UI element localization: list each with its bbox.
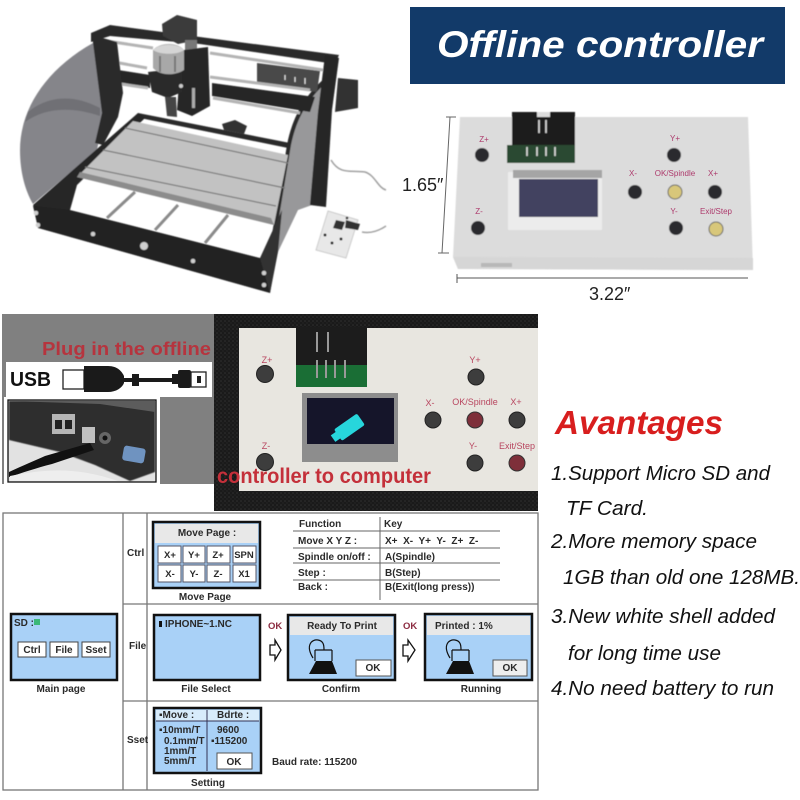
screen: main page: Main page [37,684,86,695]
advantages list: 1GB than old one 128MB. [563,567,800,589]
width dimension: 3.22″ [589,284,631,304]
controller product photo with dimensions [402,112,753,304]
USB strip: USB [10,369,51,391]
title banner [410,7,785,84]
function key table: Step : [298,568,326,579]
screen: setting: 0.1mm/T [164,736,205,747]
button labels: X+ [510,397,522,407]
Z stepper motor [162,15,197,44]
width dimension [457,274,748,304]
screen: main page: Sset [85,645,107,656]
button labels: OK/Spindle [452,397,498,407]
screen: confirm [288,615,395,695]
buttons [471,148,722,235]
function key table: Key [384,519,403,530]
function key table: A(Spindle) [385,552,435,563]
screen: setting: ▪115200 [211,736,248,747]
gantry left upright [92,35,123,145]
panel: controller connected photo [214,314,538,511]
table carriage back bar [138,113,290,148]
left acrylic shield [20,43,103,204]
screen: running: Printed : 1% [435,621,493,632]
connector [296,327,367,387]
function key table: Back : [298,582,328,593]
screen: confirm: Confirm [322,684,360,695]
advantages list: 1.Support Micro SD and [551,463,771,485]
OK arrow 2 [403,621,417,661]
advantages list: TF Card. [566,498,648,520]
controller body [453,112,753,270]
cable [331,160,386,233]
button labels: Z+ [479,135,489,144]
heading: plug in: Plug in the offline [42,339,211,359]
function key table: B(Step) [385,568,421,579]
small controller [316,211,358,258]
button labels: Y- [469,441,477,451]
screen: file select: File Select [181,684,231,695]
button labels [262,355,535,451]
height dimension: 1.65″ [402,175,444,195]
screen: main page: SD : [14,618,34,629]
screen: move page: Y+ [188,550,200,561]
screen: move page: SPN [234,550,254,561]
screen: move page: Z- [214,569,222,580]
right grey shield [269,76,330,258]
button labels: X+ [708,169,718,178]
button labels: Z+ [262,355,272,365]
OLED screen [508,170,602,230]
button labels [475,134,733,216]
screen: main page: Ctrl [23,645,41,656]
height dimension [402,117,456,253]
bolts [34,211,266,287]
USB strip [6,362,212,398]
right side bar [260,210,282,293]
IDC connector [507,112,575,163]
buttons [256,366,525,471]
Y stepper motor right [335,78,358,112]
screen: setting: Bdrte : [217,710,249,721]
advantages heading: Avantages [554,404,723,441]
row labels [127,548,149,746]
screen: move page: X+ [164,550,176,561]
gantry lower dark rail [212,83,315,112]
gantry rear plate [257,63,320,92]
function key table: X+ X- Y+ Y- Z+ Z- [385,536,478,547]
advantages list: 3.New white shell added [551,606,776,628]
screen: move page: Move Page [179,592,232,603]
panel: menu flow diagram [3,513,538,790]
carriage column [177,47,210,116]
panel: USB connection photo [2,314,214,484]
button labels: Y- [670,207,678,216]
icon: machine [309,640,337,674]
OK arrow 1 [268,621,282,660]
front base bar [33,206,277,293]
function key table: Spindle on/off : [298,552,371,563]
caption: controller to computer: controller to computer [217,465,431,488]
screen: confirm: OK [366,663,381,674]
aluminium bed [77,121,288,225]
function key table: B(Exit(long press)) [385,582,474,593]
function key table: Move X Y Z : [298,536,357,547]
screen: setting: ▪10mm/T [159,725,200,736]
screen: setting: OK [226,757,242,768]
button labels: Y+ [670,134,680,143]
screen: file select: IPHONE~1.NC [165,619,232,630]
screen: move page: X- [165,569,175,580]
screen: setting [154,708,261,789]
advantages list: 2.More memory space [550,531,757,553]
screen: file select [154,615,260,695]
advantages list: for long time use [568,643,721,665]
LCD [302,393,398,462]
spindle motor [153,44,184,74]
row labels: Ctrl [127,548,144,559]
row labels: File [129,641,147,652]
screen: main page: File [55,645,73,656]
photo: CNC engraving machine [20,15,386,293]
button labels: Z- [262,441,270,451]
screen: move page: X1 [238,569,251,580]
screen: confirm: Ready To Print [307,621,378,632]
button labels: Exit/Step [499,441,535,451]
OK arrow 2: OK [403,621,417,632]
button labels: Y+ [469,355,481,365]
OK arrow 1: OK [268,621,282,632]
base rods [107,192,228,243]
advantages list: 4.No need battery to run [551,678,774,700]
gantry top bar [91,25,339,64]
screen: setting: 9600 [217,725,240,736]
advantages list [550,463,800,700]
function key table: Function [299,519,341,530]
screen: setting: ▪Move : [159,710,194,721]
icon: machine [446,640,474,674]
spindle mount [148,68,182,98]
button labels: OK/Spindle [655,169,696,178]
screen: move page: Y- [190,569,198,580]
screen: setting: Setting [191,778,225,789]
function key table [293,517,500,600]
screen: running [425,614,532,695]
gantry right upright [310,55,339,207]
baud rate note: Baud rate: 115200 [272,757,357,768]
screen: setting: 1mm/T [164,746,196,757]
button labels: X- [629,169,637,178]
screen: running: OK [502,663,518,674]
row labels: Sset [127,735,149,746]
title banner: Offline controller [437,24,766,65]
gantry rods [100,40,323,113]
button labels: Exit/Step [700,207,733,216]
button labels: X- [426,398,435,408]
screen: move page: Z+ [212,550,224,561]
screen: running: Running [461,684,501,695]
screen: main page [11,614,117,695]
screen: move page: Move Page : [178,528,236,539]
screen: move page [153,522,260,603]
spindle bit holder [165,97,177,117]
button labels: Z- [475,207,483,216]
left base bar [33,113,145,225]
laptop port photo [4,397,160,484]
screen: setting: 5mm/T [164,756,196,767]
